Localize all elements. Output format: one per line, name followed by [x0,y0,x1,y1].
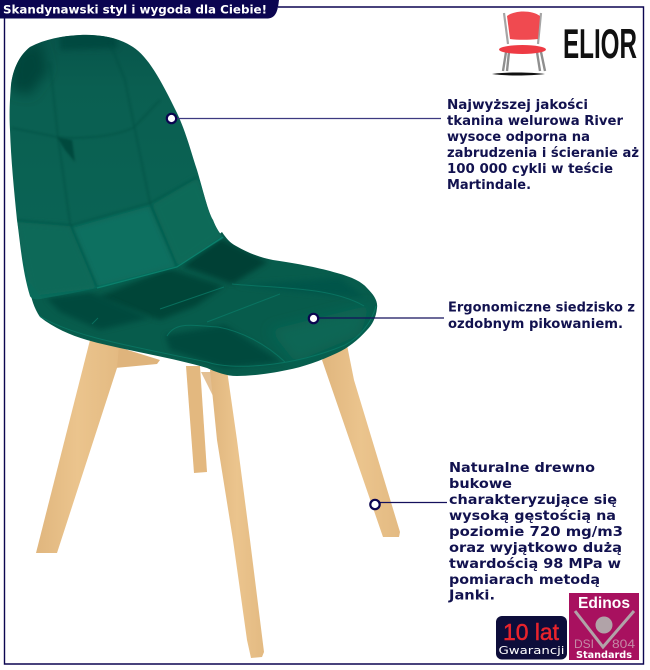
callout line: seat [318,317,444,319]
text block: fabric: 100 000 cykli w teście [447,161,613,177]
text block: fabric [447,97,639,193]
text block: fabric: zabrudzenia i ścieranie aż [447,145,639,161]
text block: seat: Ergonomiczne siedzisko z [448,300,635,316]
text block: wood: wysoką gęstością na [449,508,616,524]
leg: front middle [210,370,264,658]
text block: wood: poziomie 720 mg/m3 [449,525,623,540]
text block: wood [448,461,623,604]
badge: Edinos DSI 804 Standards: Edinos [578,595,630,612]
title banner: Skandynawski styl i wygoda dla Ciebie! [3,2,267,16]
text block: wood: Janki. [448,588,495,604]
badge: 10 lat warranty [496,616,567,660]
text block: wood: charakteryzujące się [449,493,617,508]
badge: Edinos DSI 804 Standards: DSI [574,639,594,651]
seat [30,232,377,376]
text block: wood: bukowe [449,477,512,492]
callout line: wood [380,502,447,504]
title banner [0,0,279,18]
text block: seat [448,300,635,332]
text block: fabric: Martindale. [447,178,531,193]
leg wedge [201,372,213,396]
badge: 10 lat warranty: Gwarancji [498,644,564,657]
text block: fabric: wysoce odporna na [447,130,590,145]
leg crossbar [112,345,160,368]
text block: wood: oraz wyjątkowo dużą [449,541,622,556]
text block: fabric: Najwyższej jakości [447,97,588,113]
badge: 10 lat warranty: 10 lat [503,619,560,645]
marker dot: seat [309,314,318,323]
text block: wood: pomiarach metodą [449,573,600,588]
text block: wood: Naturalne drewno [449,461,595,476]
icon: red chair logo [492,12,546,76]
marker dot: fabric [167,114,176,123]
leg: front right [322,340,400,537]
badge: Edinos DSI 804 Standards [569,593,639,661]
badge: Edinos DSI 804 Standards: Standards [576,650,632,661]
callout line: fabric [176,118,441,120]
leg: front left [36,340,119,553]
backrest [10,32,224,299]
text block: fabric: tkanina welurowa River [447,114,623,129]
badge: Edinos DSI 804 Standards: 804 [612,639,636,651]
marker dot: wood [370,500,380,509]
text block: seat: ozdobnym pikowaniem. [448,317,623,332]
leg: rear [186,366,207,473]
chair illustration [10,32,400,658]
text block: wood: twardością 98 MPa w [449,556,621,572]
